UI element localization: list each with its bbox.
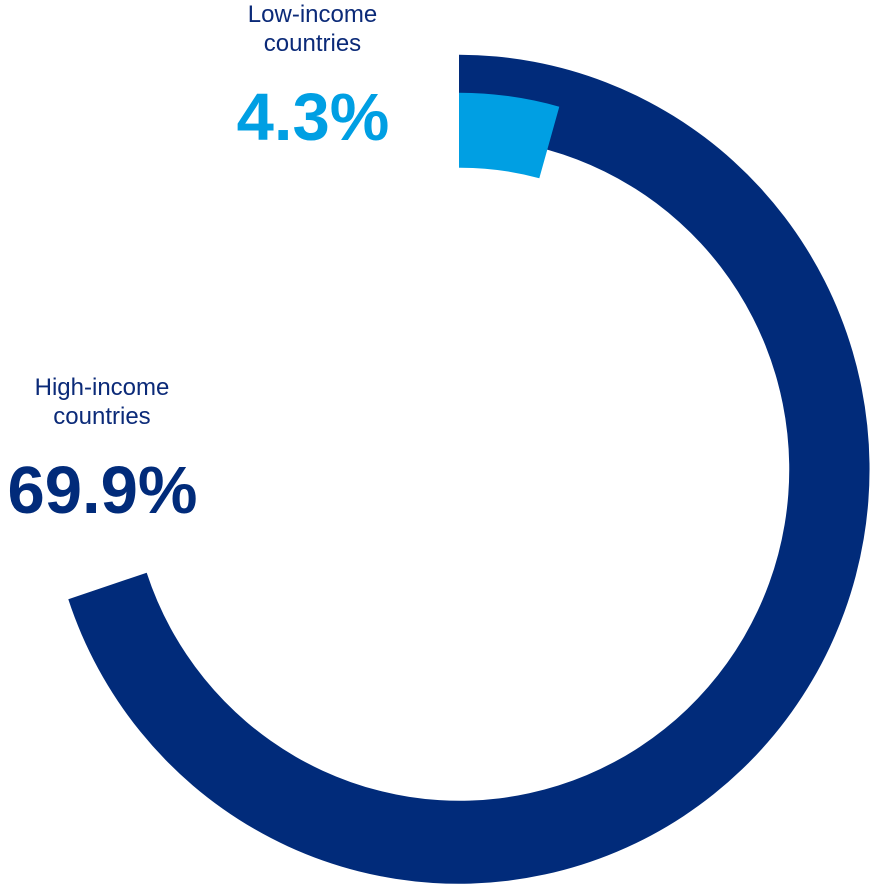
label: low-income countries: countries bbox=[264, 30, 361, 57]
value: low-income share: 4.3% bbox=[237, 80, 389, 155]
value: high-income share: 69.9% bbox=[8, 453, 197, 528]
label: low-income countries: Low-income bbox=[248, 1, 377, 28]
label: high-income countries bbox=[35, 374, 169, 430]
label: low-income countries bbox=[248, 1, 377, 57]
label: high-income countries: High-income bbox=[35, 374, 169, 401]
chart: low-income segment 4.3% bbox=[459, 93, 559, 178]
label: high-income countries: countries bbox=[53, 403, 151, 430]
